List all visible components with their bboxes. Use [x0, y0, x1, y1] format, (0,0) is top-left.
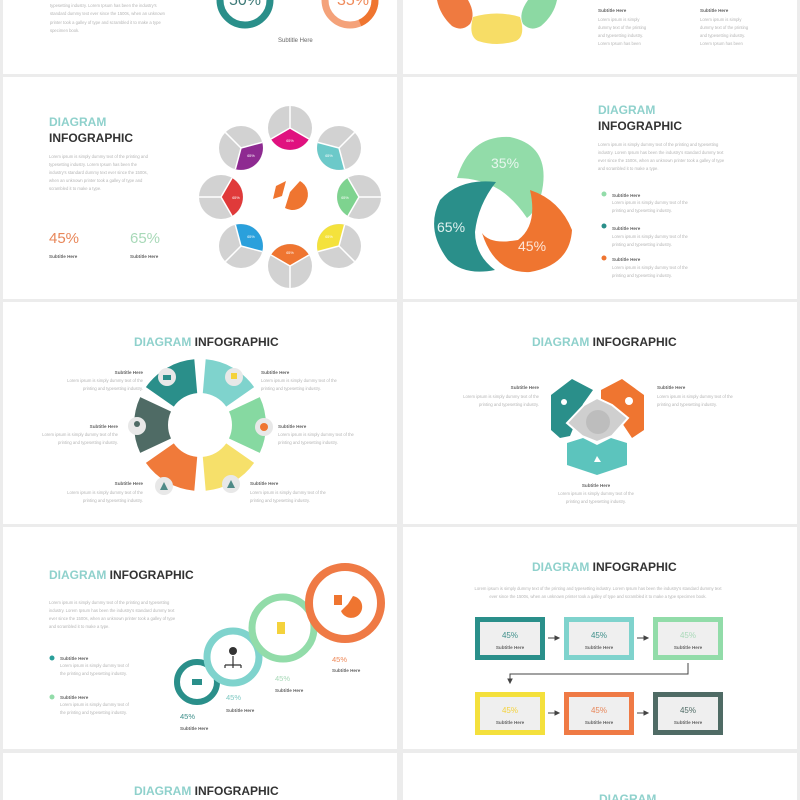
- panel: row3 left circles: [49, 567, 381, 731]
- legend: Subtitle Here: [612, 193, 641, 198]
- text block: and scrambled it to make a type.: [598, 166, 659, 171]
- panel: row3 right process boxes: Subtitle Here: [496, 720, 525, 725]
- text blocks: printing and typesetting industry.: [250, 498, 310, 503]
- text columns: Lorem ipsum is simply: [700, 17, 742, 22]
- legend: Subtitle Here: [612, 257, 641, 262]
- labels: Subtitle Here: [226, 708, 255, 713]
- legend: [50, 656, 130, 715]
- panel: row1 right swirl: [434, 103, 725, 278]
- panel: row3 right process boxes: 45%: [680, 706, 696, 715]
- stats: 65%: [130, 230, 160, 247]
- legend: Lorem ipsum is simply dummy text of: [60, 702, 130, 707]
- text block: when an unknown printer took a galley of type and: [49, 178, 143, 183]
- panel: row3 right process boxes: Subtitle Here: [496, 645, 525, 650]
- text blocks: Subtitle Here: [90, 424, 118, 429]
- panel: row3 right process boxes: 45%: [591, 631, 607, 640]
- flower chart: 65%: [286, 251, 294, 255]
- legend: the printing and typesetting industry.: [60, 710, 127, 715]
- legend: Subtitle Here: [60, 656, 89, 661]
- text blocks: Lorem ipsum is simply dummy text of the: [42, 432, 119, 437]
- text blocks: Lorem ipsum is simply dummy text of the: [261, 378, 338, 383]
- legend: printing and typesetting industry.: [612, 273, 672, 278]
- ring 35%: [325, 0, 375, 25]
- flower chart: 65%: [247, 154, 255, 158]
- panel: row4 left heading: DIAGRAM INFOGRAPHIC: [134, 784, 279, 798]
- legend: Subtitle Here: [612, 226, 641, 231]
- legend: the printing and typesetting industry.: [60, 671, 127, 676]
- heading: DIAGRAM INFOGRAPHIC: [134, 335, 279, 349]
- flower chart: [199, 106, 381, 288]
- boxes: [478, 620, 720, 732]
- labels: Subtitle Here: [332, 668, 361, 673]
- text block row0 left: printer took a galley of type and scrambled it to make a type: [50, 20, 161, 25]
- flower chart: 65%: [325, 235, 333, 239]
- panel: row2 left cycle: [42, 335, 355, 503]
- text columns: dummy text of the printing: [598, 25, 647, 30]
- text block: Lorem ipsum is simply dummy text of the printing and typesetting: [598, 142, 719, 147]
- text columns: Lorem Ipsum has been: [598, 41, 642, 46]
- heading: DIAGRAM INFOGRAPHIC: [532, 560, 677, 574]
- panel: row3 right process boxes: 45%: [591, 706, 607, 715]
- labels: 45%: [180, 712, 195, 721]
- heading: DIAGRAM: [598, 103, 655, 117]
- labels: 45%: [332, 655, 347, 664]
- panel: row3 right process boxes: 45%: [680, 631, 696, 640]
- text blocks: printing and typesetting industry.: [261, 386, 321, 391]
- text block row0 left: specimen book.: [50, 28, 79, 33]
- panel: row3 right process boxes: Subtitle Here: [674, 645, 703, 650]
- panel: row3 right process boxes: Subtitle Here: [585, 645, 614, 650]
- text columns: dummy text of the printing: [700, 25, 749, 30]
- panel: row3 right process boxes: [475, 560, 722, 732]
- text columns: Subtitle Here: [700, 8, 729, 13]
- text blocks: Subtitle Here: [261, 370, 290, 375]
- heading: DIAGRAM INFOGRAPHIC: [49, 568, 194, 582]
- text blocks: Lorem ipsum is simply dummy text of the: [657, 394, 734, 399]
- swirl chart: 45%: [518, 238, 546, 254]
- text blocks: printing and typesetting industry.: [278, 440, 338, 445]
- text blocks: printing and typesetting industry.: [657, 402, 717, 407]
- text blocks: Subtitle Here: [250, 481, 279, 486]
- flower chart: 65%: [286, 139, 294, 143]
- text blocks: Lorem ipsum is simply dummy text of the: [67, 490, 144, 495]
- labels: Subtitle Here: [275, 688, 304, 693]
- labels: Subtitle Here: [180, 726, 209, 731]
- flower chart: 65%: [232, 196, 240, 200]
- text blocks: Lorem ipsum is simply dummy text of the: [67, 378, 144, 383]
- text columns: Lorem ipsum is simply: [598, 17, 640, 22]
- arrows: [508, 636, 688, 715]
- ring 50%: [220, 0, 270, 25]
- text blocks: printing and typesetting industry.: [58, 440, 118, 445]
- text block: ever since the 1500s, when an unknown printer took a galley of type and scrambled it to make a type specimen book.: [489, 594, 707, 599]
- text block: [49, 154, 149, 191]
- text blocks: printing and typesetting industry.: [479, 402, 539, 407]
- text block: industry's standard dummy text ever since the 1500s,: [49, 170, 148, 175]
- text block row0 left: standard dummy text ever since the 1500s, when an unknown: [50, 11, 166, 16]
- legend: Subtitle Here: [60, 695, 89, 700]
- icons: [128, 368, 273, 495]
- text blocks: Subtitle Here: [657, 385, 686, 390]
- text blocks: printing and typesetting industry.: [83, 386, 143, 391]
- legend: Lorem ipsum is simply dummy text of the: [612, 234, 689, 239]
- text block: and scrambled it to make a type.: [49, 624, 110, 629]
- legend: printing and typesetting industry.: [612, 208, 672, 213]
- heading: DIAGRAM: [49, 115, 106, 129]
- text block: industry. Lorem Ipsum has been the industry's standard dummy text: [49, 608, 175, 613]
- subtitle: Subtitle Here: [278, 38, 313, 44]
- text columns: and typesetting industry.: [598, 33, 643, 38]
- text block row0 left: typesetting industry. Lorem Ipsum has been the industry's: [50, 3, 157, 8]
- panel: row3 right process boxes: Subtitle Here: [585, 720, 614, 725]
- text block: [49, 600, 176, 629]
- cycle sectors: [134, 359, 266, 491]
- text columns: [598, 8, 749, 46]
- text blocks: Subtitle Here: [582, 483, 611, 488]
- legend: printing and typesetting industry.: [612, 242, 672, 247]
- text blocks: Lorem ipsum is simply dummy text of the: [278, 432, 355, 437]
- text block: [475, 586, 722, 599]
- legend: Lorem ipsum is simply dummy text of: [60, 663, 130, 668]
- text blocks: [42, 370, 355, 503]
- flower chart: 65%: [325, 154, 333, 158]
- text blocks: Subtitle Here: [278, 424, 307, 429]
- panel: row2 right hexagon: [463, 335, 734, 504]
- panel: row1 left flower: [49, 106, 381, 288]
- text block: [598, 142, 725, 171]
- panel: row3 right process boxes: 45%: [502, 631, 518, 640]
- text columns: and typesetting industry.: [700, 33, 745, 38]
- labels: [180, 655, 361, 731]
- text blocks: Lorem ipsum is simply dummy text of the: [558, 491, 635, 496]
- flower chart: 65%: [341, 196, 349, 200]
- text blocks: Subtitle Here: [511, 385, 539, 390]
- text block: ever since the 1500s, when an unknown printer took a galley of type: [49, 616, 176, 621]
- panel: row3 right process boxes: 45%: [502, 706, 518, 715]
- panel: row3 right process boxes: Subtitle Here: [674, 720, 703, 725]
- labels: 45%: [226, 693, 241, 702]
- text blocks: printing and typesetting industry.: [566, 499, 626, 504]
- text block: scrambled it to make a type.: [49, 186, 101, 191]
- legend: [602, 192, 689, 278]
- panel: row0 right: [437, 0, 749, 46]
- text blocks: Lorem ipsum is simply dummy text of the: [250, 490, 327, 495]
- stats: Subtitle Here: [130, 254, 159, 259]
- text columns: Lorem Ipsum has been: [700, 41, 744, 46]
- text blocks: [463, 385, 734, 504]
- legend: Lorem ipsum is simply dummy text of the: [612, 200, 689, 205]
- text block row0 left: [50, 3, 166, 33]
- text blocks: Subtitle Here: [115, 370, 143, 375]
- text block: Lorem ipsum is simply dummy text of the printing and: [49, 154, 149, 159]
- text block: industry. Lorem Ipsum has been the industry's standard dummy text: [598, 150, 724, 155]
- hexagon diagram: [551, 379, 644, 475]
- heading: [598, 103, 682, 133]
- flower chart: 65%: [247, 235, 255, 239]
- text block: ever since the 1500s, when an unknown printer took a galley of type: [598, 158, 725, 163]
- text block: typesetting industry. Lorem Ipsum has been the: [49, 162, 138, 167]
- stats: Subtitle Here: [49, 254, 78, 259]
- circle steps: [177, 567, 381, 702]
- stats: 45%: [49, 230, 79, 247]
- heading: INFOGRAPHIC: [598, 119, 682, 133]
- swirl chart: 65%: [437, 219, 465, 235]
- swirl chart: [434, 137, 572, 272]
- icon: pie center: [273, 181, 308, 210]
- heading: INFOGRAPHIC: [49, 131, 133, 145]
- heading: [49, 115, 133, 145]
- legend: Lorem ipsum is simply dummy text of the: [612, 265, 689, 270]
- text blocks: Lorem ipsum is simply dummy text of the: [463, 394, 540, 399]
- text blocks: printing and typesetting industry.: [83, 498, 143, 503]
- panel: row0 left: [50, 0, 375, 44]
- heading: DIAGRAM INFOGRAPHIC: [532, 335, 677, 349]
- labels: 45%: [275, 674, 290, 683]
- stats: [49, 230, 160, 259]
- text blocks: Subtitle Here: [115, 481, 143, 486]
- text block: Lorem ipsum is simply dummy text of the printing and typesetting industry. Lorem Ipsum has been the industry's standard dummy text: [475, 586, 722, 591]
- swirl chart: 35%: [491, 155, 519, 171]
- petals: [437, 0, 557, 44]
- text block: Lorem ipsum is simply dummy text of the printing and typesetting: [49, 600, 170, 605]
- text columns: Subtitle Here: [598, 8, 627, 13]
